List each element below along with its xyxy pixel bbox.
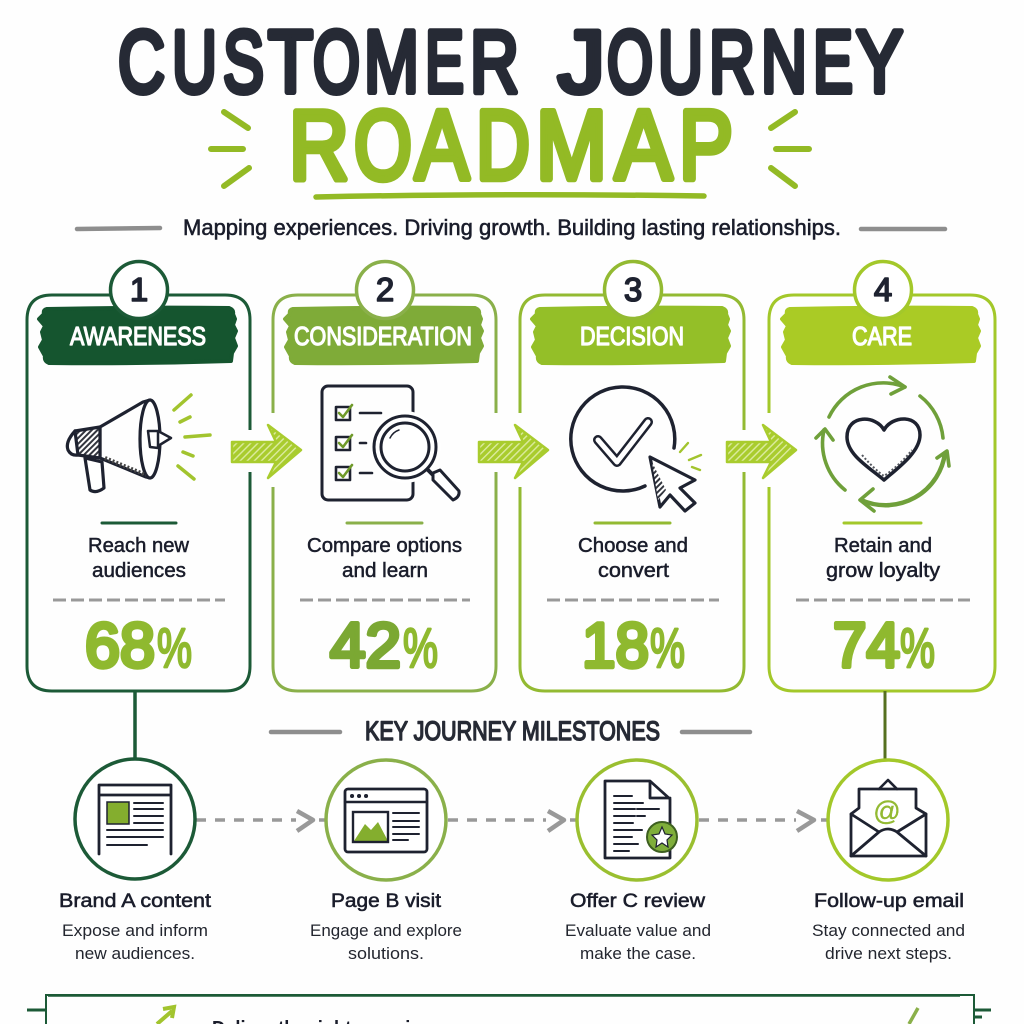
- title: T: [268, 12, 313, 111]
- description: new audiences.: [75, 944, 195, 963]
- icon: megaphone: [67, 395, 210, 492]
- title: E: [813, 12, 853, 111]
- title: O: [607, 12, 653, 111]
- icon: check and cursor: [571, 387, 701, 511]
- step number 4: 4: [874, 271, 892, 308]
- milestone: follow-up email: [812, 760, 965, 963]
- metric 42%: %: [403, 616, 438, 679]
- underline: [102, 522, 176, 524]
- arrow: decision to care: [727, 425, 796, 478]
- title: M: [536, 90, 607, 200]
- title: E: [425, 12, 464, 111]
- milestone: brand a content: [59, 759, 212, 963]
- description: and learn: [342, 560, 428, 582]
- description: Stay connected and: [812, 921, 965, 940]
- label: Page B visit: [331, 890, 442, 912]
- title rays and underline: [211, 112, 809, 197]
- title: O: [354, 90, 412, 200]
- milestone: page b visit: [310, 760, 462, 963]
- arrow: consideration to decision: [479, 425, 548, 478]
- title: R: [709, 12, 755, 111]
- dashed arrow 1: [196, 811, 325, 831]
- title: U: [172, 12, 217, 111]
- description: Expose and inform: [62, 921, 208, 940]
- icon: checklist and magnifier: [322, 386, 459, 500]
- panel: consideration: [273, 262, 496, 691]
- banner: care: CARE: [852, 321, 912, 351]
- step number 3: 3: [624, 271, 642, 308]
- metric 18%: %: [650, 616, 685, 679]
- panel: care: [769, 262, 995, 691]
- title: A: [415, 90, 470, 200]
- step number 3: [604, 262, 662, 318]
- step number 2: 2: [376, 271, 394, 308]
- description: Choose and: [578, 535, 688, 557]
- accent stroke: [909, 1008, 918, 1024]
- title: R: [470, 12, 519, 111]
- title: [118, 12, 903, 200]
- metric 42%: 42: [330, 611, 401, 681]
- banner: consideration: CONSIDERATION: [294, 321, 472, 351]
- description: make the case.: [580, 944, 696, 963]
- label: Brand A content: [59, 890, 212, 912]
- milestone: offer c review: [565, 760, 711, 963]
- icon: envelope: [828, 760, 948, 880]
- title: A: [615, 90, 673, 200]
- title: N: [761, 12, 807, 111]
- dashed arrow 2: [448, 811, 576, 831]
- title: C: [118, 12, 165, 111]
- description: grow loyalty: [826, 560, 940, 582]
- metric 18%: 18: [582, 611, 649, 681]
- title: M: [364, 12, 419, 111]
- panel: decision: [520, 262, 744, 691]
- icon: growth arrow: [157, 1007, 174, 1024]
- metric 68%: %: [157, 616, 192, 679]
- description: Compare options: [307, 535, 462, 557]
- subtitle: Mapping experiences. Driving growth. Building lasting relationships.: [183, 215, 841, 240]
- description: Retain and: [834, 535, 932, 557]
- title: J: [558, 12, 605, 111]
- underline: [347, 522, 422, 524]
- banner: decision: DECISION: [580, 321, 684, 351]
- description: Engage and explore: [310, 921, 462, 940]
- metric 74%: 74: [833, 611, 900, 681]
- connector: care to milestone: [884, 691, 886, 760]
- description: Evaluate value and: [565, 921, 711, 940]
- description: Reach new: [88, 535, 190, 557]
- underline: [595, 522, 670, 524]
- title: S: [223, 12, 264, 111]
- icon: envelope: @: [873, 796, 901, 826]
- step number 1: [110, 262, 168, 318]
- title: Y: [856, 12, 903, 111]
- bottom panel: [27, 995, 991, 1024]
- banner: consideration: [285, 308, 482, 363]
- step number 1: 1: [130, 271, 148, 308]
- step number 4: [854, 262, 912, 318]
- title: D: [476, 90, 530, 200]
- banner: awareness: AWARENESS: [70, 321, 206, 351]
- banner: care: [782, 308, 979, 363]
- underline: [844, 522, 921, 524]
- banner: decision: [532, 308, 729, 363]
- metric 68%: 68: [85, 611, 155, 681]
- banner: awareness: [39, 308, 236, 363]
- metric 74%: %: [900, 616, 935, 679]
- connector: awareness to milestone: [133, 691, 137, 760]
- title: P: [679, 90, 733, 200]
- label: Follow-up email: [814, 890, 964, 912]
- label: Offer C review: [570, 890, 706, 912]
- description: drive next steps.: [825, 944, 952, 963]
- description: solutions.: [348, 944, 424, 963]
- title: R: [289, 90, 349, 200]
- panel: awareness: [27, 262, 250, 691]
- arrow: awareness to consideration: [232, 425, 301, 478]
- dashed arrow 3: [699, 811, 827, 831]
- section heading: key journey milestones: KEY JOURNEY MILESTONES: [365, 716, 660, 746]
- icon: article page: [75, 759, 195, 879]
- description: audiences: [92, 560, 186, 582]
- icon: document with badge: [577, 760, 697, 880]
- description: convert: [598, 560, 669, 582]
- title: U: [658, 12, 703, 111]
- title: O: [313, 12, 360, 111]
- step number 2: [356, 262, 414, 318]
- icon: heart in cycle: [816, 377, 949, 511]
- icon: browser window: [326, 760, 446, 880]
